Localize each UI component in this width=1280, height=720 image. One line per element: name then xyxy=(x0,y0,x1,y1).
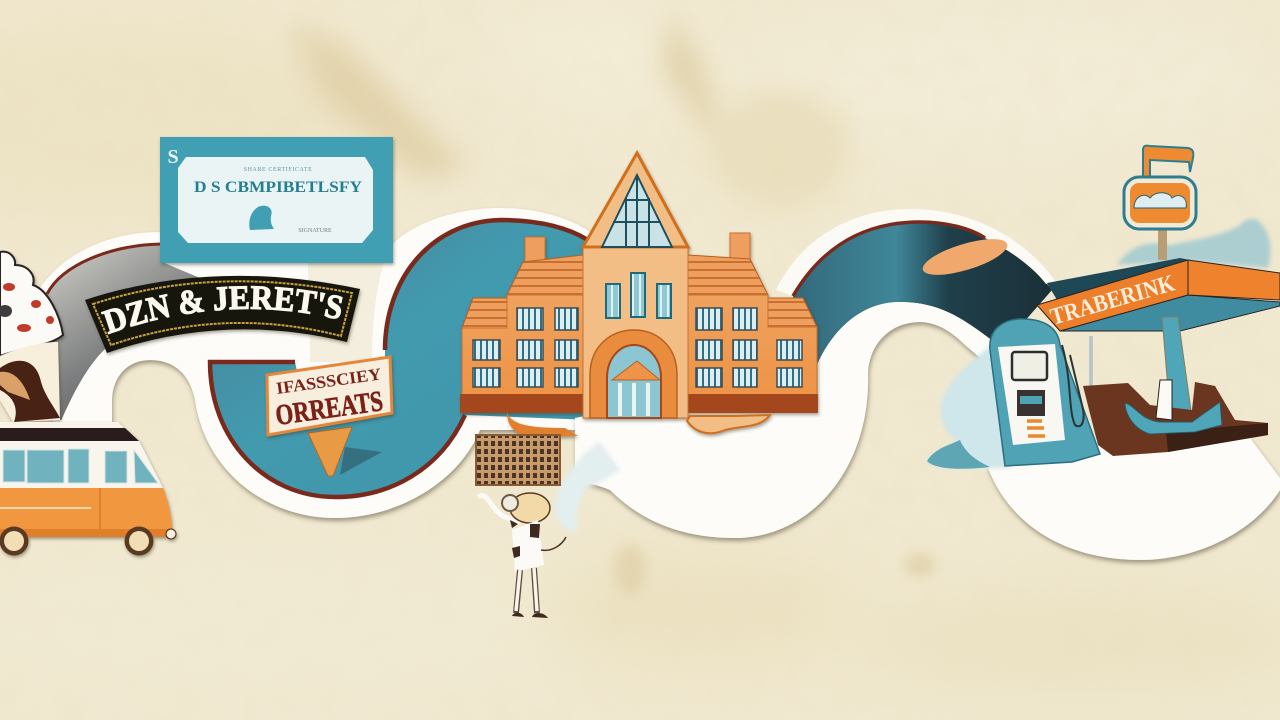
canopy lettering: TRABERINK xyxy=(1047,270,1178,331)
certificate xyxy=(160,137,393,263)
truck roof xyxy=(0,422,140,446)
sign pole xyxy=(1158,228,1167,260)
truck lower trim xyxy=(0,529,172,537)
banner shape xyxy=(85,276,360,353)
brand banner xyxy=(85,276,363,356)
panel: dome red rim xyxy=(793,222,985,296)
smoke: pale blue cloud by pump xyxy=(927,345,1010,468)
ice cream cone xyxy=(0,252,63,422)
cow head xyxy=(510,493,550,523)
tower windows xyxy=(606,273,671,318)
pump price marks xyxy=(1027,421,1045,436)
left low roof xyxy=(462,298,507,328)
truck dark band xyxy=(0,428,139,441)
gas station xyxy=(990,258,1280,466)
panel: dome white outer rim xyxy=(776,209,1056,296)
certificate: seal xyxy=(249,206,274,230)
sign capsule xyxy=(1124,177,1196,229)
building xyxy=(460,153,818,437)
entrance glass xyxy=(607,345,661,418)
sign cloud xyxy=(1134,193,1186,208)
shop sign with cone xyxy=(267,357,392,476)
panel: centre white ribbon xyxy=(575,302,1002,538)
dark chocolate chip xyxy=(0,305,12,317)
cow legs highlight xyxy=(516,568,537,611)
entrance canopy xyxy=(612,361,660,380)
building base xyxy=(460,394,818,413)
panel: bottom-right white blob xyxy=(988,438,1280,560)
pump logo xyxy=(1017,390,1045,416)
truck windows xyxy=(3,449,158,483)
panel: dark teal dome window xyxy=(793,222,1052,370)
sign capsule fill xyxy=(1130,183,1190,223)
red sprinkles xyxy=(3,283,54,332)
cow muzzle xyxy=(502,495,518,511)
upper floor windows xyxy=(473,308,802,387)
cone body xyxy=(0,342,60,422)
right scroll xyxy=(687,415,770,433)
dark seat shade xyxy=(1166,423,1268,452)
dark drip xyxy=(340,447,382,475)
entrance arch xyxy=(590,330,677,418)
pump white panel xyxy=(998,344,1065,445)
cow arm xyxy=(478,496,520,522)
truck orange body xyxy=(0,488,172,536)
canopy front fascia xyxy=(1037,260,1188,331)
gable glass xyxy=(602,175,672,247)
certificate: small heading: SHARE CERTIFICATE xyxy=(244,167,312,173)
right main roof xyxy=(688,255,768,295)
cow body xyxy=(512,520,544,572)
canopy right fascia xyxy=(1188,260,1280,300)
cow legs xyxy=(516,568,537,613)
panel: white slope under left window xyxy=(58,322,310,430)
sign second line: ORREATS xyxy=(274,385,385,432)
gable xyxy=(583,153,688,247)
panel: left white ribbon and big ring xyxy=(28,208,600,518)
right low roof xyxy=(768,298,817,327)
right support column xyxy=(1162,317,1193,425)
banner gold line xyxy=(93,281,352,345)
entrance doors xyxy=(620,383,648,416)
scoop xyxy=(0,252,63,356)
certificate: signature: SIGNATURE xyxy=(298,228,332,234)
smoke: darker teal pool xyxy=(927,440,990,469)
certificate: teal border xyxy=(160,137,393,263)
truck stripe xyxy=(0,507,91,509)
rear wheel xyxy=(0,526,28,556)
pump logo color xyxy=(1020,396,1042,404)
truck panel line xyxy=(99,488,101,534)
waffle cone xyxy=(308,427,352,476)
left scroll xyxy=(507,413,578,437)
left main roof xyxy=(507,255,583,295)
panel: cream patch behind ring xyxy=(308,262,384,362)
cow spots xyxy=(510,520,540,558)
chocolate swirl xyxy=(0,361,60,422)
cow holding sign xyxy=(476,435,566,618)
cow sign board xyxy=(476,435,560,485)
sign first line: IFASSSCIEY xyxy=(275,364,383,398)
gable mullions xyxy=(613,175,661,247)
cow tail xyxy=(541,537,566,550)
white filler xyxy=(1156,380,1172,420)
building walls xyxy=(462,295,817,395)
cow feet xyxy=(512,613,548,618)
panel: left window red rim xyxy=(47,244,162,294)
brown seat base xyxy=(1083,382,1268,456)
certificate: main title: D S CBMPIBETLSFY xyxy=(194,179,362,196)
panel: big teal ring window xyxy=(210,220,592,497)
canopy underside xyxy=(1060,295,1280,331)
panel: left grey window xyxy=(40,244,300,420)
banner text: DZN & JERET'S xyxy=(100,286,343,334)
teal hose trough xyxy=(1125,402,1222,434)
truck bumper xyxy=(166,529,176,539)
central tower xyxy=(583,247,688,418)
watercolor splash behind sign xyxy=(1117,219,1270,268)
pump body xyxy=(990,319,1100,466)
roadside sign xyxy=(1124,146,1196,260)
icon: orange ellipse in dome xyxy=(919,232,1011,282)
pump screen xyxy=(1012,352,1047,380)
panel: teal ring dark red rim xyxy=(210,220,588,497)
caramel swirl xyxy=(0,372,30,400)
chimneys xyxy=(525,233,750,262)
banner text path xyxy=(108,309,342,334)
food truck xyxy=(0,422,176,556)
certificate: inner panel xyxy=(178,157,373,243)
certificate: corner ornament: S xyxy=(167,146,179,168)
sign board xyxy=(267,357,392,435)
truck window band xyxy=(0,441,163,488)
thin support xyxy=(1089,336,1093,392)
smoke: pale blue cloud by cow sign xyxy=(555,442,620,531)
canopy top xyxy=(1047,258,1190,305)
orange hook xyxy=(1143,146,1193,178)
pump hose xyxy=(1062,345,1084,426)
front wheel xyxy=(124,526,154,556)
